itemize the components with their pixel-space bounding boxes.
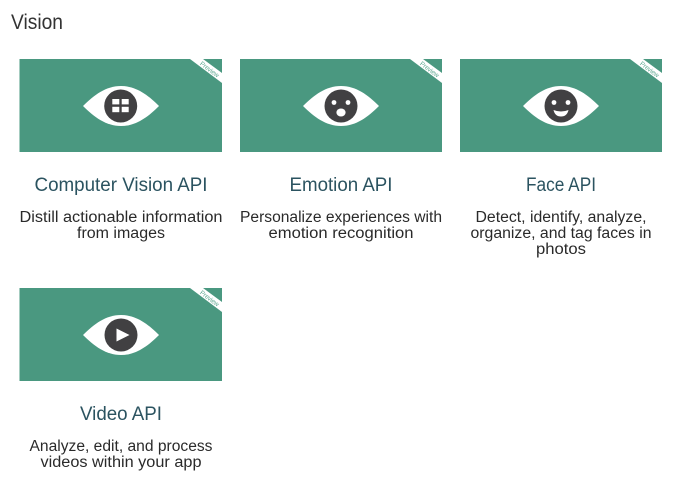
icon: eye with play button bbox=[83, 315, 159, 355]
preview ribbon: Preview bbox=[198, 61, 220, 80]
icon: eye with smiling face bbox=[523, 86, 599, 126]
panel: Video API bbox=[20, 288, 222, 471]
preview ribbon: Preview bbox=[638, 61, 660, 80]
title: Emotion API bbox=[290, 175, 392, 196]
description: Analyze, edit, and process bbox=[30, 438, 213, 455]
title: Computer Vision API bbox=[34, 175, 208, 196]
preview ribbon bbox=[630, 59, 662, 83]
description: emotion recognition bbox=[268, 225, 414, 242]
description: Distill actionable information bbox=[20, 209, 222, 226]
panel: Computer Vision API bbox=[20, 59, 222, 242]
description bbox=[20, 209, 222, 242]
card banner bbox=[20, 288, 222, 381]
description: organize, and tag faces in bbox=[470, 225, 652, 242]
title: Face API bbox=[526, 175, 596, 196]
icon: eye with surprised face bbox=[303, 86, 379, 126]
card banner bbox=[20, 59, 222, 152]
preview ribbon bbox=[190, 288, 222, 312]
description: photos bbox=[536, 241, 586, 258]
preview ribbon: Preview bbox=[418, 61, 440, 80]
icon: eye with grid bbox=[83, 86, 159, 126]
description bbox=[30, 438, 213, 471]
description: from images bbox=[77, 225, 165, 242]
preview ribbon: Preview bbox=[198, 290, 220, 309]
description: Personalize experiences with bbox=[240, 209, 442, 226]
card banner bbox=[240, 59, 442, 152]
heading: Vision: Vision bbox=[11, 11, 63, 34]
description bbox=[240, 209, 442, 242]
card banner bbox=[460, 59, 662, 152]
preview ribbon bbox=[190, 59, 222, 83]
description: videos within your app bbox=[40, 454, 202, 471]
description bbox=[470, 209, 652, 258]
preview ribbon bbox=[410, 59, 442, 83]
title: Video API bbox=[80, 404, 162, 425]
panel: Emotion API bbox=[240, 59, 442, 242]
panel: Face API bbox=[460, 59, 662, 258]
description: Detect, identify, analyze, bbox=[476, 209, 646, 226]
